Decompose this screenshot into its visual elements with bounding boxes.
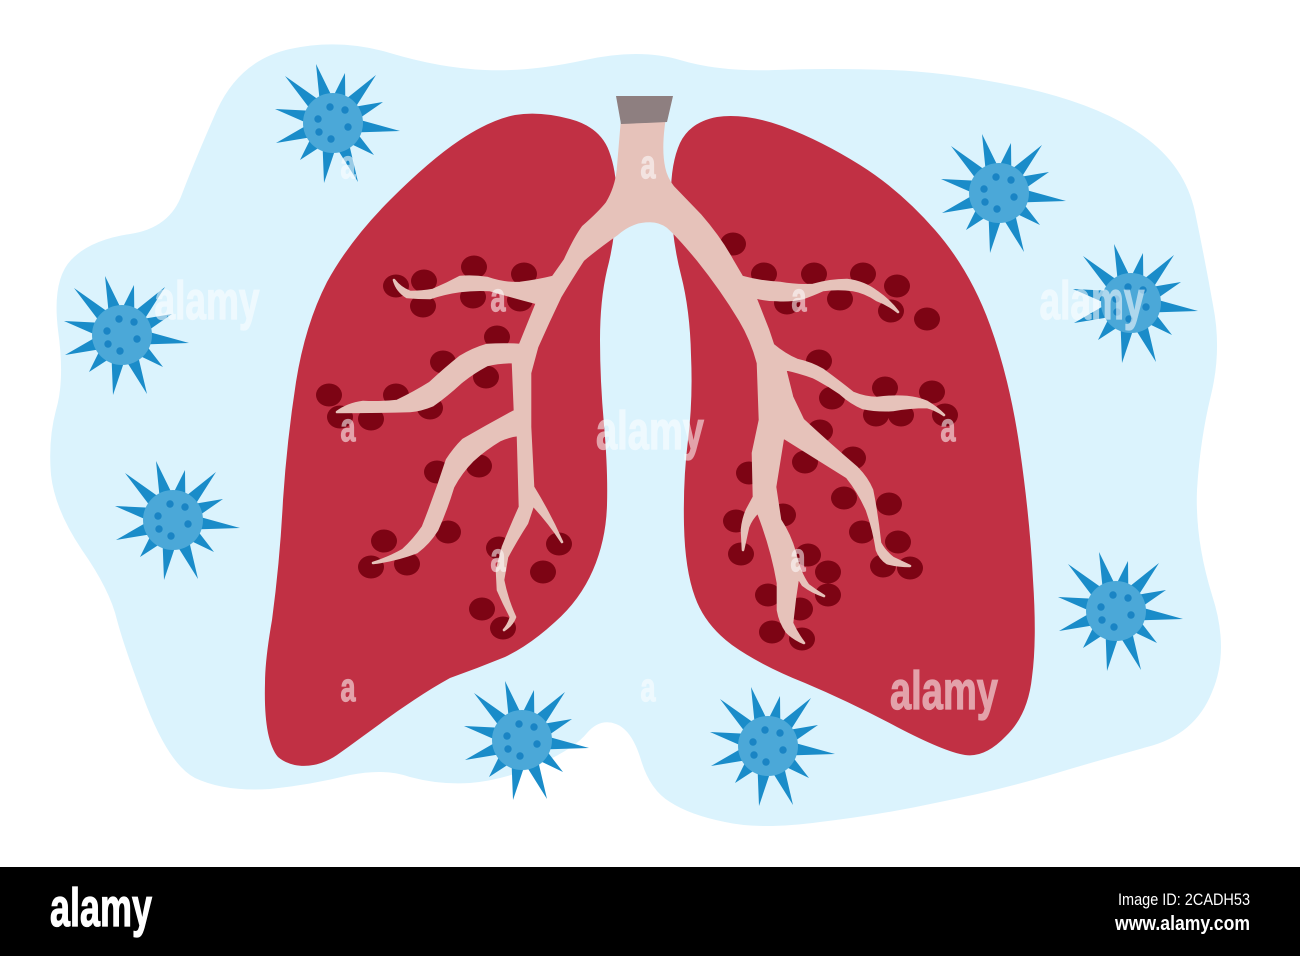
watermarks: a	[490, 536, 506, 580]
watermarks: alamy	[890, 661, 998, 721]
watermarks: a	[792, 276, 807, 320]
left lung	[265, 114, 616, 766]
watermarks: a	[940, 406, 956, 450]
footer url: www.alamy.com	[1114, 913, 1250, 935]
virus, right lower	[1058, 552, 1183, 671]
watermarks: a	[340, 406, 356, 450]
virus, left lower	[115, 461, 240, 580]
right lung	[671, 116, 1035, 755]
watermarks: a	[490, 276, 506, 320]
background blob	[50, 44, 1221, 826]
bronchial tree	[337, 122, 944, 643]
watermarks: alamy	[154, 271, 260, 331]
footer logo: alamy	[50, 878, 152, 938]
infection spots: left lung	[316, 256, 572, 640]
footer bar	[0, 867, 1300, 956]
watermarks: a	[640, 666, 656, 710]
watermarks: a	[640, 143, 656, 187]
watermarks: a	[790, 536, 806, 580]
footer image id: Image ID: 2CADH53	[1118, 890, 1250, 909]
watermarks: a	[340, 143, 356, 187]
virus, right middle	[1073, 244, 1198, 363]
virus, bottom centre	[710, 687, 835, 806]
virus, top right	[941, 134, 1066, 253]
watermarks: alamy	[1040, 271, 1144, 331]
infection spots: right lung	[720, 232, 958, 650]
watermarks	[154, 143, 1144, 721]
watermarks: alamy	[596, 401, 704, 461]
virus, left upper	[64, 276, 189, 395]
virus, bottom left	[464, 681, 589, 800]
trachea cap	[616, 96, 673, 124]
virus, top left	[275, 64, 400, 183]
watermarks: a	[340, 666, 356, 710]
